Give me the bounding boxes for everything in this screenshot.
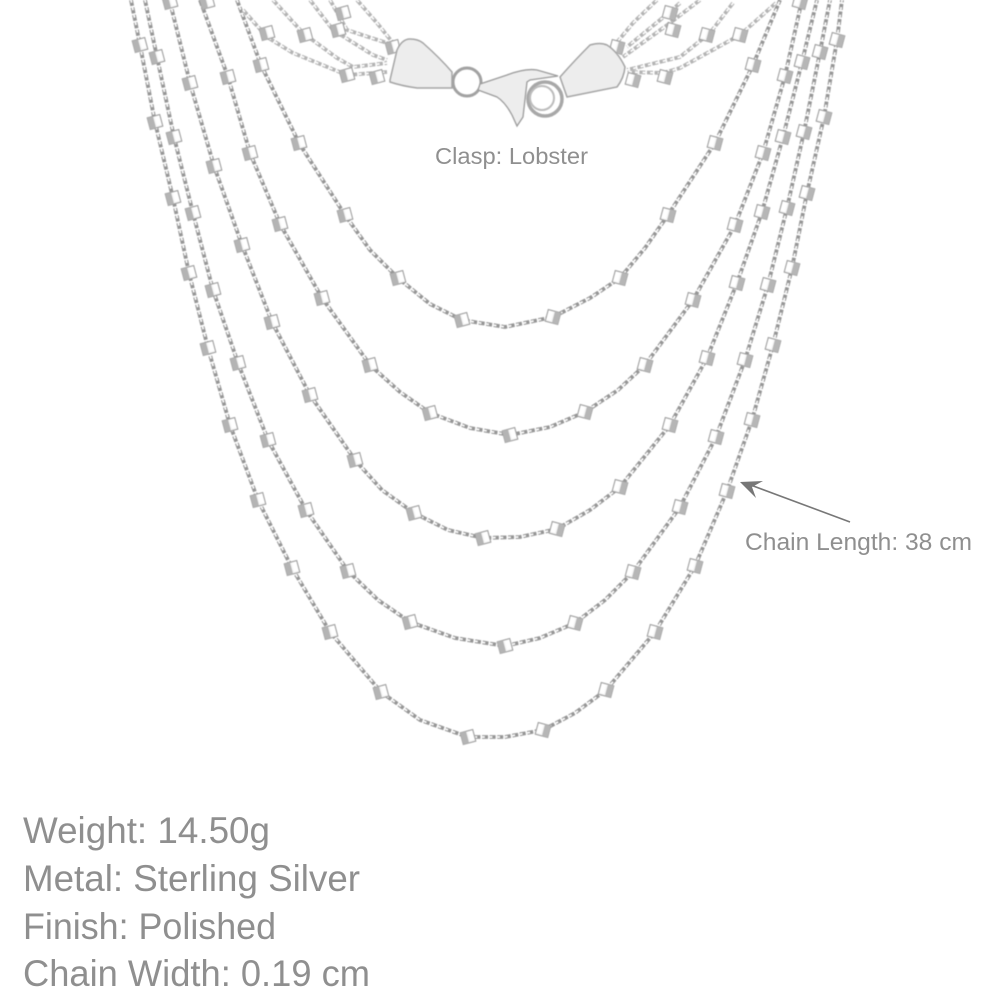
metal: Metal: Sterling Silver [23,858,360,899]
jump ring [453,68,481,96]
necklace strand 1 [237,0,780,327]
necklace strand 3 [162,0,817,545]
finish: Finish: Polished [23,906,276,947]
lobster clasp [390,39,625,126]
specifications text block [23,810,370,990]
right end cap [560,44,625,97]
necklace strand 5 [131,0,845,744]
label: chain length: Chain Length: 38 cm [745,529,972,556]
necklace strand 4 [145,0,830,653]
label: clasp: Clasp: Lobster [435,143,588,169]
arrow to chain [740,481,850,522]
lobster loop [528,82,562,116]
necklace strand 2 [199,0,808,442]
lobster body [478,70,558,126]
left end cap [390,39,452,88]
upper strands joining the clasp [243,0,776,87]
weight: Weight: 14.50g [23,810,270,851]
